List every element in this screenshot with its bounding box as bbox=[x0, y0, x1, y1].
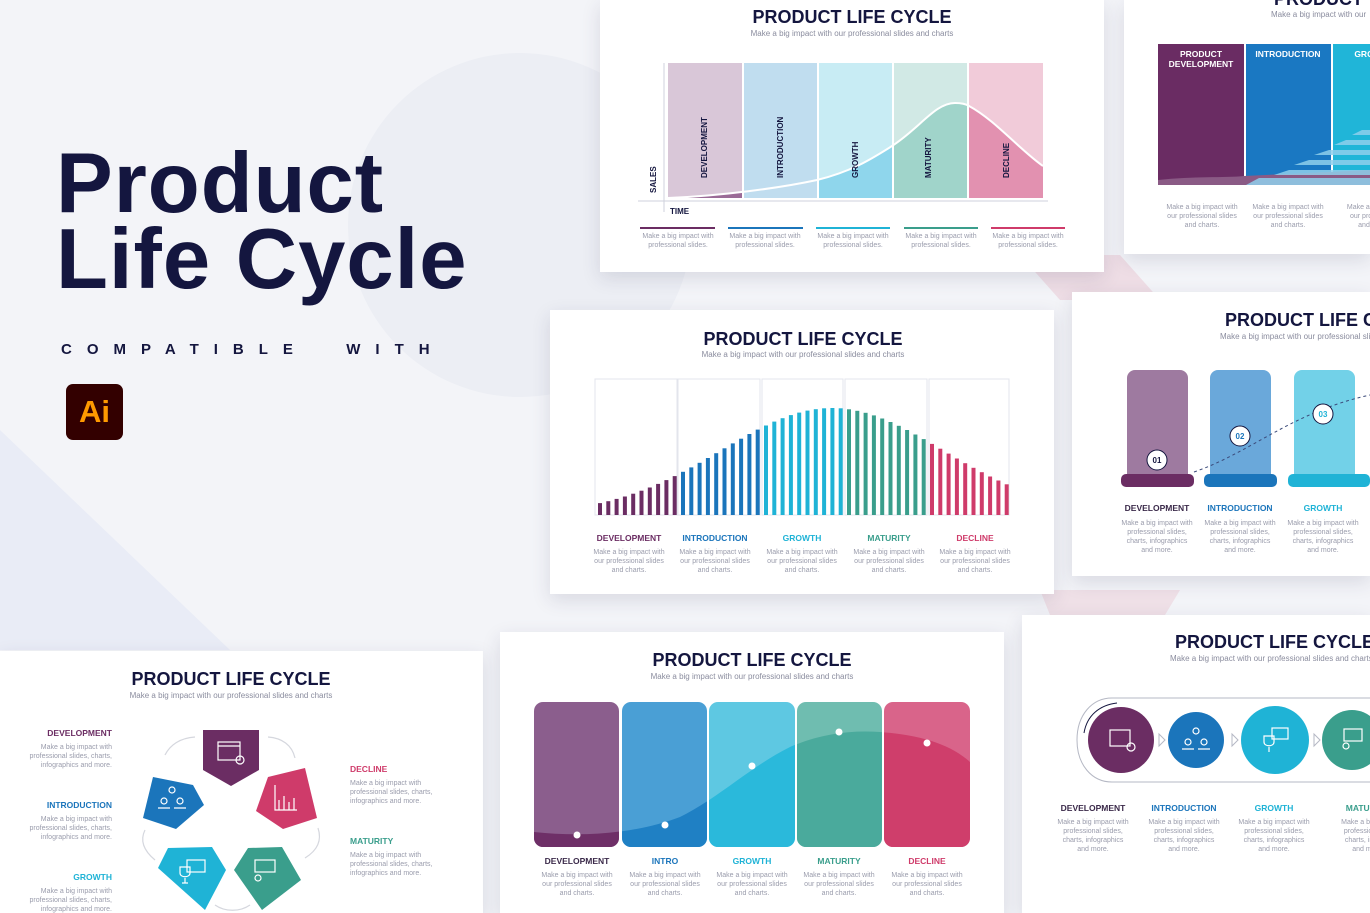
panel: pentagon cycle: infographics and more. bbox=[350, 870, 421, 877]
panel: rounded columns with curve: Make a big impact with bbox=[541, 872, 613, 879]
panel: bar chart: our professional slides bbox=[680, 558, 750, 565]
panel: pentagon cycle: Make a big impact with bbox=[350, 780, 421, 787]
stage texts: DECLINE bbox=[350, 764, 388, 774]
panel: pillars with markers: and more. bbox=[1224, 547, 1256, 554]
panel: rounded columns with curve bbox=[500, 632, 1004, 913]
legend notes: professional slides. bbox=[998, 242, 1058, 249]
panel: bar chart: our professional slides bbox=[940, 558, 1010, 565]
panel: rounded columns with curve: our professional slides bbox=[630, 881, 700, 888]
heading: PRODUCT LIFE CYCLE bbox=[652, 650, 852, 670]
legend notes: professional slides. bbox=[648, 242, 708, 249]
panel: sales curve chart: Make a big impact with our professional slides and charts bbox=[751, 29, 953, 38]
panel: pillars with markers: Make a big impact with bbox=[1121, 520, 1193, 527]
panel: bar chart: Make a big impact with our professional slides and charts bbox=[702, 350, 904, 359]
panel: bar chart: our professional slides bbox=[594, 558, 664, 565]
stage texts: INTRODUCTION bbox=[47, 800, 112, 810]
panel: bar chart: and charts. bbox=[785, 567, 819, 574]
panel: pentagon cycle: infographics and more. bbox=[41, 762, 112, 769]
panel: pentagon cycle: professional slides, charts, bbox=[350, 861, 433, 868]
panel: bar chart: Make a big impact with bbox=[939, 549, 1011, 556]
stage labels: DECLINE bbox=[908, 856, 946, 866]
legend notes: Make a big impact with bbox=[817, 233, 889, 240]
panel: rounded columns with curve: Make a big impact with bbox=[891, 872, 963, 879]
panel: pillars with markers: professional slides, bbox=[1210, 529, 1270, 536]
panel: bar chart: Make a big impact with bbox=[679, 549, 751, 556]
panel: pillars with markers: charts, infographics bbox=[1210, 538, 1271, 545]
stage texts: DEVELOPMENT bbox=[47, 728, 113, 738]
icon: adobe illustrator: Ai bbox=[79, 394, 110, 429]
chart: stage columns: GROWTH bbox=[851, 141, 860, 178]
notes: our professional slides bbox=[1253, 213, 1323, 220]
panel: bar chart: our professional slides bbox=[767, 558, 837, 565]
panel: pillars with markers: Make a big impact with bbox=[1204, 520, 1276, 527]
rounded stage columns bbox=[534, 702, 970, 852]
panel: pillars with markers: and more. bbox=[1307, 547, 1339, 554]
notes: and charts. bbox=[1185, 222, 1219, 229]
panel: rounded columns with curve: our professional slides bbox=[892, 881, 962, 888]
panel: bar chart: and charts. bbox=[872, 567, 906, 574]
panel: pentagon cycle: professional slides, charts, bbox=[30, 753, 112, 760]
panel: pentagon cycle bbox=[0, 651, 483, 913]
panel: rounded columns with curve: and charts. bbox=[560, 890, 594, 897]
panel: pentagon cycle: Make a big impact with bbox=[41, 816, 112, 823]
notes: and charts. bbox=[1271, 222, 1305, 229]
stage labels: MATURITY bbox=[817, 856, 861, 866]
stage texts: MATURITY bbox=[350, 836, 394, 846]
stage labels: MATURITY bbox=[867, 533, 911, 543]
panel: stair chart (partial): Make a big impact with our bbox=[1271, 10, 1366, 19]
stage labels: DEVELOPMENT bbox=[545, 856, 610, 866]
stage texts: GROWTH bbox=[73, 872, 112, 882]
panel: circle process: Make a big impact with bbox=[1057, 819, 1129, 826]
bar chart bbox=[595, 379, 1009, 515]
panel: bar chart: and charts. bbox=[612, 567, 646, 574]
panel: circle process: and more. bbox=[1077, 846, 1109, 853]
panel: pillars with markers: and more. bbox=[1141, 547, 1173, 554]
panel: pillars with markers bbox=[1072, 292, 1370, 576]
pillars: 01 bbox=[1153, 456, 1162, 465]
panel: pillars with markers: charts, infographics bbox=[1127, 538, 1188, 545]
panel: sales curve chart bbox=[600, 0, 1104, 272]
panel: bar chart: and charts. bbox=[958, 567, 992, 574]
panel: circle process: and more. bbox=[1258, 846, 1290, 853]
stage labels bbox=[597, 533, 994, 543]
legend notes: professional slides. bbox=[735, 242, 795, 249]
panel: pentagon cycle: Make a big impact with our professional slides and charts bbox=[130, 691, 332, 700]
chart: stage columns: TIME bbox=[670, 207, 690, 216]
legend notes bbox=[640, 227, 1065, 249]
panel: rounded columns with curve: and charts. bbox=[648, 890, 682, 897]
panel: bar chart bbox=[550, 310, 1054, 594]
panel: rounded columns with curve: and charts. bbox=[910, 890, 944, 897]
chart: stage columns bbox=[638, 63, 1048, 216]
main title bbox=[56, 136, 468, 307]
stage labels: INTRODUCTION bbox=[1151, 803, 1217, 813]
panel: circle process: Make a big impact with bbox=[1148, 819, 1220, 826]
panel: pentagon cycle: professional slides, charts, bbox=[350, 789, 433, 796]
chart columns: INTRODUCTION bbox=[1255, 49, 1321, 59]
panel: bar chart: and charts. bbox=[698, 567, 732, 574]
panel: pillars with markers: charts, infographics bbox=[1293, 538, 1354, 545]
legend notes: Make a big impact with bbox=[729, 233, 801, 240]
stage labels: GROWTH bbox=[1255, 803, 1293, 813]
chart: stage columns: SALES bbox=[649, 166, 658, 193]
panel: pillars with markers: professional slides, bbox=[1127, 529, 1187, 536]
panel: circle process: professional slides, bbox=[1244, 828, 1304, 835]
stage labels: GROWTH bbox=[783, 533, 821, 543]
notes: Make a big impact with bbox=[1252, 204, 1324, 211]
panel: pillars with markers: Make a big impact with bbox=[1287, 520, 1359, 527]
main title: Life Cycle bbox=[56, 212, 468, 307]
main title: Product bbox=[56, 136, 384, 231]
panel: rounded columns with curve: Make a big impact with bbox=[803, 872, 875, 879]
panel: rounded columns with curve: Make a big impact with bbox=[629, 872, 701, 879]
legend notes: Make a big impact with bbox=[905, 233, 977, 240]
notes: Make a big impact with bbox=[1166, 204, 1238, 211]
pillars: 02 bbox=[1236, 432, 1245, 441]
labels: DEVELOPMENT bbox=[1125, 503, 1190, 513]
panel: circle process: Make a big impact with bbox=[1238, 819, 1310, 826]
heading: PRODUCT LIFE CYCLE bbox=[131, 669, 331, 689]
stage labels: DEVELOPMENT bbox=[597, 533, 662, 543]
labels: INTRODUCTION bbox=[1207, 503, 1273, 513]
stage labels: INTRO bbox=[652, 856, 679, 866]
heading: PRODUCT LIFE CYCLE bbox=[1175, 632, 1370, 652]
labels: GROWTH bbox=[1304, 503, 1342, 513]
panel: pentagon cycle: professional slides, charts, bbox=[30, 825, 112, 832]
panel: bar chart: Make a big impact with bbox=[593, 549, 665, 556]
notes: our professional slides bbox=[1167, 213, 1237, 220]
panel: pentagon cycle: infographics and more. bbox=[41, 834, 112, 841]
panel: rounded columns with curve: Make a big impact with our professional slides and charts bbox=[651, 672, 853, 681]
panel: circle process: charts, infographics bbox=[1244, 837, 1305, 844]
pillars bbox=[1121, 370, 1370, 487]
panel: circle process bbox=[1022, 615, 1370, 913]
panel: bar chart: Make a big impact with bbox=[853, 549, 925, 556]
stage labels: DECLINE bbox=[956, 533, 994, 543]
panel: bar chart: our professional slides bbox=[854, 558, 924, 565]
panel: pentagon cycle: Make a big impact with bbox=[41, 744, 112, 751]
panel: pillars with markers: professional slides, bbox=[1293, 529, 1353, 536]
notes bbox=[1166, 204, 1370, 229]
stage labels: DEVELOPMENT bbox=[1061, 803, 1126, 813]
panel: rounded columns with curve: and charts. bbox=[735, 890, 769, 897]
panel: circle process: charts, infographics bbox=[1154, 837, 1215, 844]
stage labels: INTRODUCTION bbox=[682, 533, 748, 543]
notes: and bbox=[1358, 222, 1370, 229]
panel: rounded columns with curve: our professional slides bbox=[717, 881, 787, 888]
panel: circle process: professional slides, bbox=[1154, 828, 1214, 835]
panel: circle process: charts, infographics bbox=[1063, 837, 1124, 844]
icon: adobe illustrator bbox=[66, 384, 123, 440]
panel: pentagon cycle: infographics and more. bbox=[41, 906, 112, 913]
compatible with text: COMPATIBLE WITH bbox=[61, 341, 445, 358]
chart: stage columns: DEVELOPMENT bbox=[700, 117, 709, 178]
legend notes: Make a big impact with bbox=[992, 233, 1064, 240]
panel: pentagon cycle: professional slides, charts, bbox=[30, 897, 112, 904]
panel: stair chart (partial) bbox=[1124, 0, 1370, 254]
panel: pentagon cycle: Make a big impact with bbox=[41, 888, 112, 895]
panel: rounded columns with curve: our professional slides bbox=[542, 881, 612, 888]
panel: pentagon cycle: infographics and more. bbox=[350, 798, 421, 805]
chart columns bbox=[1158, 44, 1370, 185]
stage labels: GROWTH bbox=[733, 856, 771, 866]
heading: PRODUCT LIFE CYCLE bbox=[703, 329, 903, 349]
pentagon cycle diagram bbox=[143, 730, 319, 910]
stage labels bbox=[545, 856, 946, 866]
chart: stage columns: DECLINE bbox=[1002, 142, 1011, 178]
chart columns: DEVELOPMENT bbox=[1169, 59, 1234, 69]
panel: circle process: professional slides, bbox=[1063, 828, 1123, 835]
pillars: 03 bbox=[1319, 410, 1328, 419]
legend notes: professional slides. bbox=[823, 242, 883, 249]
labels bbox=[1125, 503, 1342, 513]
chart columns: PRODUCT bbox=[1180, 49, 1223, 59]
panel: circle process: and more. bbox=[1168, 846, 1200, 853]
stage labels bbox=[1061, 803, 1370, 813]
heading: PRODUCT LIFE CYCLE bbox=[752, 7, 952, 27]
panel: rounded columns with curve: our professional slides bbox=[804, 881, 874, 888]
panel: rounded columns with curve: and charts. bbox=[822, 890, 856, 897]
panel: rounded columns with curve: Make a big impact with bbox=[716, 872, 788, 879]
panel: circle process: Make a big impact with our professional slides and charts bbox=[1170, 654, 1370, 663]
circle process bbox=[1077, 698, 1370, 782]
chart: stage columns: MATURITY bbox=[924, 137, 933, 178]
panel: pentagon cycle: Make a big impact with bbox=[350, 852, 421, 859]
legend notes: Make a big impact with bbox=[642, 233, 714, 240]
stage texts bbox=[47, 728, 394, 882]
legend notes: professional slides. bbox=[911, 242, 971, 249]
chart: stage columns: INTRODUCTION bbox=[776, 116, 785, 178]
panel: bar chart: Make a big impact with bbox=[766, 549, 838, 556]
